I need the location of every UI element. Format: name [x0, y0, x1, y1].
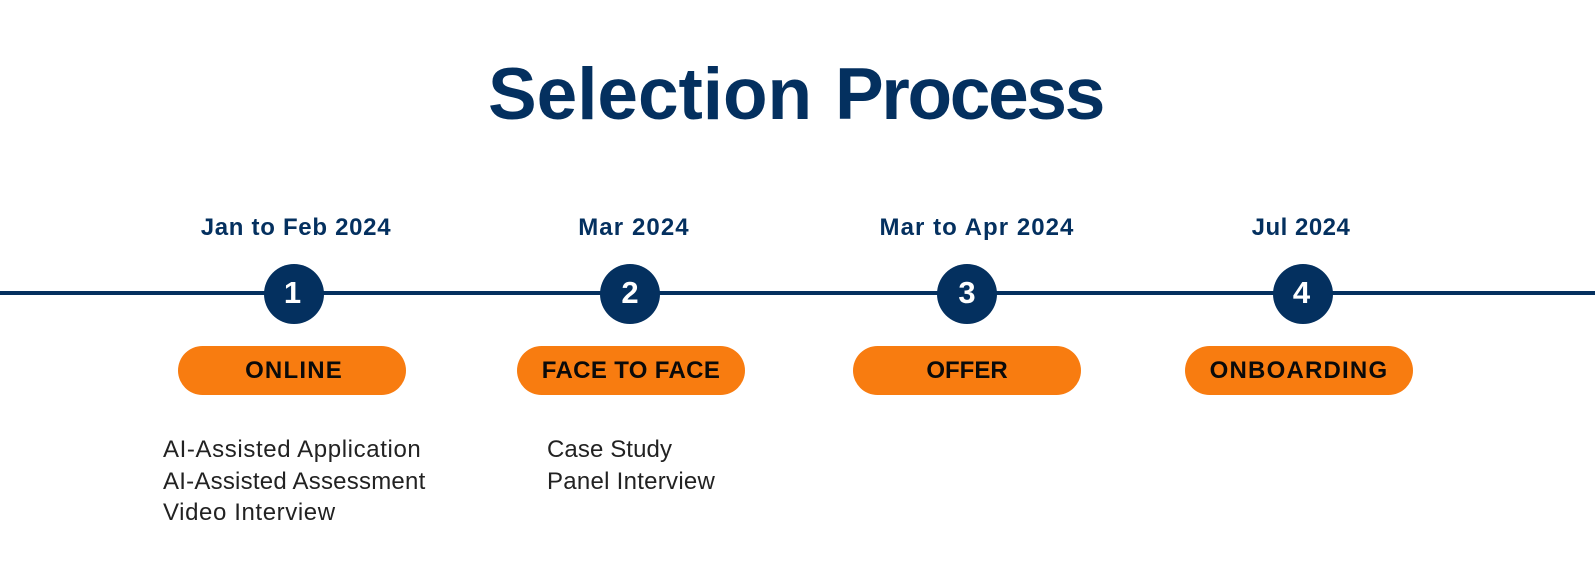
title: Selection — [488, 54, 812, 135]
step marker 3: 3 — [958, 274, 976, 310]
list: face to face activities: Case Study — [547, 436, 672, 463]
list: face to face activities — [547, 436, 715, 494]
step marker 2: 2 — [621, 274, 639, 310]
list: online activities: Video Interview — [163, 499, 336, 526]
date: step 1: Jan to Feb 2024 — [201, 214, 391, 241]
pill: onboarding — [1185, 346, 1413, 395]
timeline line — [0, 291, 1595, 295]
list: online activities: AI-Assisted Application — [163, 436, 421, 463]
date: step 3: Mar to Apr 2024 — [880, 214, 1074, 241]
pill: onboarding: ONBOARDING — [1210, 357, 1388, 384]
title — [488, 54, 1103, 135]
step marker 4: 4 — [1293, 274, 1310, 310]
title: Process — [835, 54, 1103, 135]
date: step 4: Jul 2024 — [1252, 214, 1350, 241]
list: online activities: AI-Assisted Assessment — [163, 468, 426, 494]
date: step 2: Mar 2024 — [578, 214, 690, 241]
pill: offer: OFFER — [926, 357, 1008, 384]
pill: face to face — [517, 346, 745, 395]
step marker 4 — [1273, 264, 1333, 324]
pill: face to face: FACE TO FACE — [542, 357, 720, 384]
step marker 3 — [937, 264, 997, 324]
pill: online: ONLINE — [245, 357, 343, 384]
list: online activities — [163, 436, 426, 526]
step marker 2 — [600, 264, 660, 324]
step marker 1 — [264, 264, 324, 324]
step marker 1: 1 — [284, 274, 301, 310]
list: face to face activities: Panel Interview — [547, 468, 715, 494]
pill: offer — [853, 346, 1081, 395]
pill: online — [178, 346, 406, 395]
